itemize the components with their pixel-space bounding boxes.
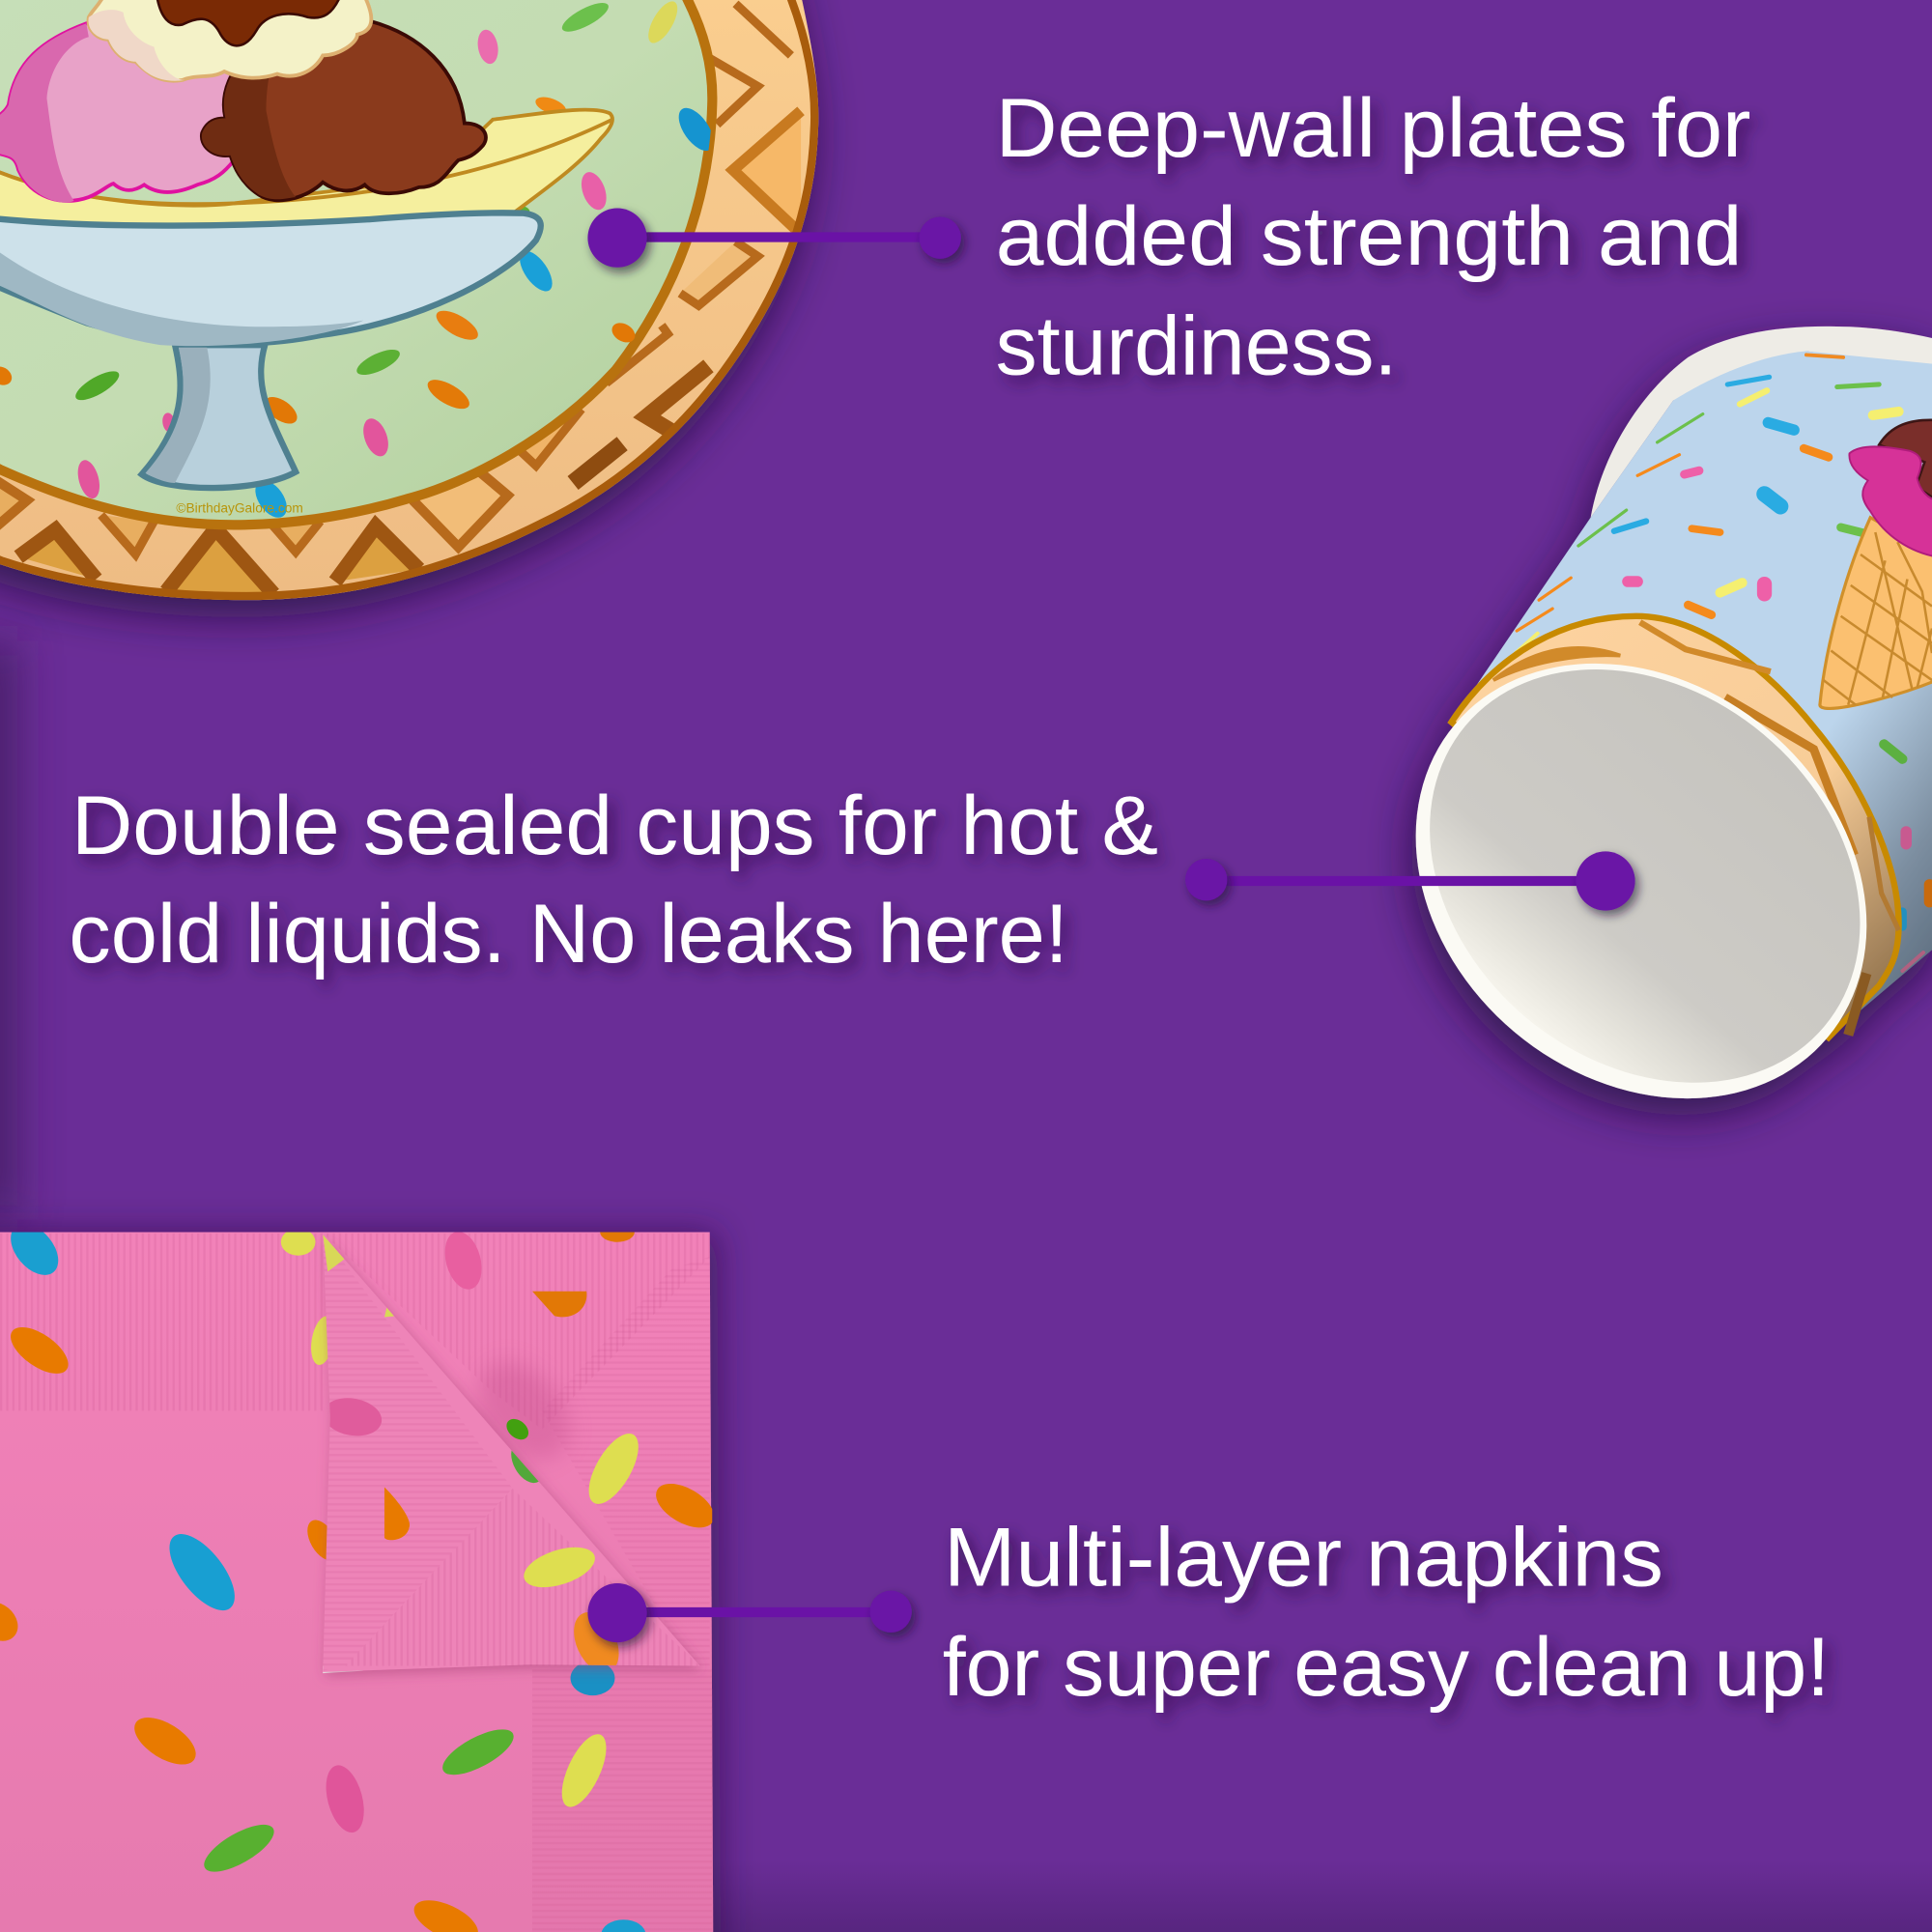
ice cream cone bbox=[1820, 518, 1932, 708]
chocolate syrup bbox=[156, 0, 341, 45]
plate callout connector bbox=[587, 209, 961, 268]
plate bbox=[0, 0, 818, 600]
whipped cream bbox=[89, 0, 371, 81]
plate small dot bbox=[920, 216, 961, 259]
napkin sprinkles bbox=[0, 1215, 722, 1932]
cup rim bbox=[1591, 327, 1932, 518]
cup base inner bbox=[1347, 584, 1932, 1168]
bowl bbox=[0, 213, 541, 346]
napkin text: for super easy clean up! bbox=[943, 1620, 1830, 1714]
cup small dot bbox=[1185, 859, 1227, 900]
napkin callout connector bbox=[587, 1583, 912, 1642]
plate text: sturdiness. bbox=[996, 299, 1397, 393]
napkin text bbox=[943, 1511, 1830, 1714]
napkin text: Multi-layer napkins bbox=[944, 1511, 1663, 1605]
rim zigzag pattern bbox=[0, 4, 801, 594]
plate text bbox=[996, 81, 1750, 393]
plate text: Deep-wall plates for bbox=[996, 81, 1750, 175]
cup body bbox=[1452, 352, 1932, 1037]
cup text: Double sealed cups for hot & bbox=[71, 779, 1158, 872]
banana bbox=[0, 110, 612, 228]
cup text: cold liquids. No leaks here! bbox=[69, 887, 1068, 980]
napkin big dot bbox=[587, 1583, 647, 1642]
cup sprinkles bbox=[1516, 355, 1929, 971]
cup base outer bbox=[1328, 574, 1932, 1188]
cup text bbox=[69, 779, 1158, 980]
napkin fold bbox=[320, 1235, 699, 1680]
cup wafer band bbox=[1452, 616, 1899, 1037]
stem bbox=[142, 345, 296, 488]
napkin body bbox=[0, 1233, 714, 1932]
band chevrons bbox=[1493, 622, 1899, 1035]
chocolate ice cream scoop bbox=[202, 21, 486, 200]
cup callout connector bbox=[1185, 851, 1635, 911]
plate sprinkles bbox=[0, 0, 721, 524]
plate big dot bbox=[587, 209, 647, 268]
pink ice cream scoop bbox=[0, 23, 246, 203]
fold ribs bbox=[323, 1235, 513, 1671]
napkin ribbed bands bbox=[0, 1234, 712, 1932]
cup bbox=[1385, 318, 1932, 1142]
copyright text: ©BirthdayGalore.com bbox=[176, 501, 303, 516]
cup big dot bbox=[1576, 851, 1635, 911]
napkin bbox=[0, 1215, 722, 1932]
fold sprinkles bbox=[320, 1235, 628, 1680]
plate rim bbox=[0, 0, 818, 600]
plate centre bbox=[0, 0, 712, 525]
plate text: added strength and bbox=[996, 189, 1743, 283]
napkin small dot bbox=[870, 1591, 912, 1633]
ice cream on cone bbox=[1849, 420, 1932, 557]
rim outer band bbox=[0, 0, 818, 600]
